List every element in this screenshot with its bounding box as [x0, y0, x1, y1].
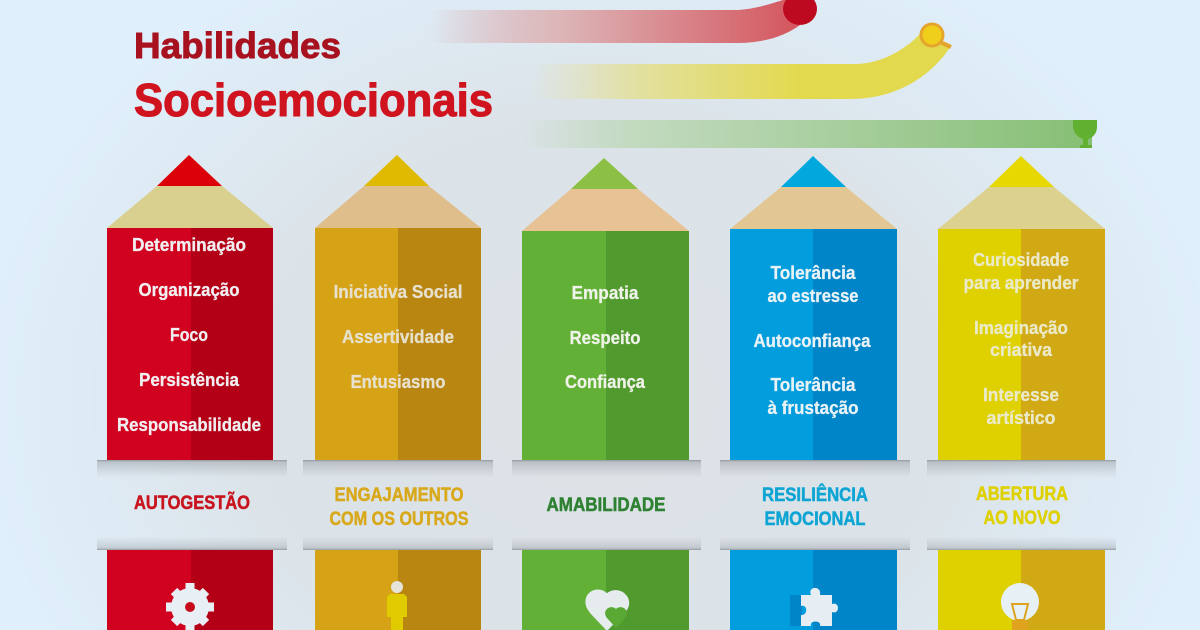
skills list: Organização: [138, 280, 240, 300]
skills list: para aprender: [964, 273, 1078, 293]
ribbon: green with trophy: [520, 120, 1097, 148]
skills list: Interesse: [983, 385, 1059, 405]
skills list: artístico: [986, 408, 1056, 428]
icon: gear: [166, 583, 214, 630]
label band: abertura ao novo: [927, 460, 1116, 550]
icon: trophy: [1073, 120, 1097, 148]
label band: engajamento com os outros: [303, 460, 493, 550]
skills list: Curiosidade: [973, 250, 1069, 270]
icon: light bulb: [1001, 583, 1039, 630]
icon: person: [387, 581, 407, 630]
label band: resiliência emocional: [720, 460, 910, 550]
pencil 4: resiliência: [730, 156, 897, 630]
pencil 3: amabilidade: [522, 158, 689, 630]
label band: amabilidade: [512, 460, 701, 550]
skills list: Autoconfiança: [754, 331, 871, 351]
label band: engajamento com os outros: COM OS OUTROS: [330, 509, 468, 530]
icon: magnifier: [921, 24, 951, 47]
icon: puzzle: [790, 588, 838, 626]
label band: autogestão: [97, 460, 287, 550]
label band: amabilidade: AMABILIDADE: [546, 495, 666, 516]
icon: hearts: [585, 590, 629, 630]
ribbon: yellow with magnifier: [530, 24, 951, 99]
skills list: Persistência: [139, 370, 240, 390]
skills list: [117, 235, 261, 435]
skills list: Entusiasmo: [350, 372, 446, 392]
skills list: [754, 263, 871, 418]
skills list: à frustação: [768, 398, 858, 418]
skills list: Determinação: [132, 235, 246, 255]
skills list: [565, 283, 646, 392]
title: [134, 25, 493, 126]
title: Habilidades: [134, 25, 341, 66]
skills list: ao estresse: [768, 286, 858, 306]
label band: engajamento com os outros: ENGAJAMENTO: [334, 485, 464, 506]
skills list: Respeito: [570, 328, 640, 348]
pencil 2: engajamento: [315, 155, 481, 630]
label band: autogestão: AUTOGESTÃO: [134, 492, 250, 514]
skills list: Foco: [170, 325, 208, 345]
skills list: criativa: [990, 340, 1053, 360]
pencil 1: autogestão: [107, 155, 273, 630]
skills list: [334, 282, 462, 392]
ribbon: red with ball: [430, 0, 817, 43]
skills list: Empatia: [572, 283, 639, 303]
pencil 5: abertura: [938, 156, 1105, 630]
skills list: Assertividade: [342, 327, 454, 347]
skills list: Imaginação: [974, 318, 1068, 338]
skills list: Confiança: [565, 372, 646, 392]
label band: abertura ao novo: ABERTURA: [976, 484, 1068, 505]
skills list: Responsabilidade: [117, 415, 261, 435]
label band: abertura ao novo: AO NOVO: [984, 508, 1060, 529]
skills list: Iniciativa Social: [334, 282, 462, 302]
label band: resiliência emocional: RESILIÊNCIA: [762, 484, 868, 506]
skills list: Tolerância: [770, 375, 856, 395]
label band: resiliência emocional: EMOCIONAL: [764, 509, 866, 530]
title: Socioemocionais: [134, 74, 493, 126]
skills list: Tolerância: [770, 263, 856, 283]
icon: red ball: [783, 0, 817, 25]
skills list: [964, 250, 1078, 428]
